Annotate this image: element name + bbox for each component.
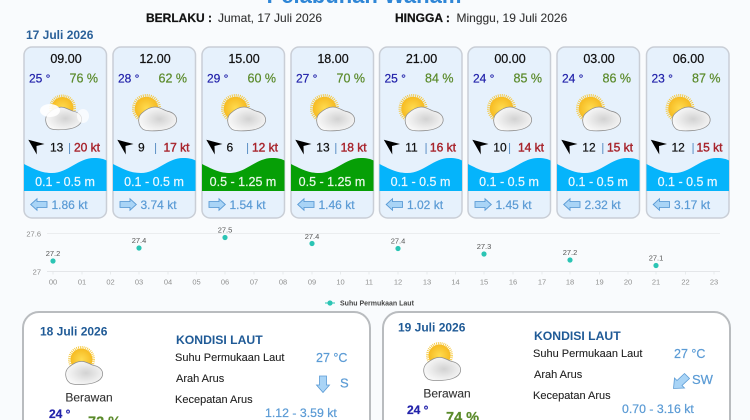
forecast card 09.00: 20 kt (74, 140, 101, 154)
forecast card 18.00: 18 kt (341, 140, 367, 154)
forecast card 03.00: 0.1 - 0.5 m (568, 175, 628, 189)
x axis labels: 22 (681, 278, 690, 286)
x axis labels: 03 (135, 278, 143, 286)
x axis labels: 01 (78, 278, 86, 286)
x axis labels: 11 (365, 278, 373, 286)
data labels: 27.5 (218, 226, 232, 234)
panel: 18 Juli 2026: Berawan (65, 390, 113, 404)
forecast card 03.00: 24 ° (562, 72, 584, 86)
forecast card 06.00: 06.00 (673, 52, 704, 66)
forecast card 18.00: 27 ° (296, 72, 318, 86)
x axis labels: 15 (480, 278, 488, 286)
data points (50, 235, 659, 268)
x axis labels: 08 (279, 278, 287, 286)
forecast card 09.00: 76 % (70, 72, 98, 86)
forecast card 21.00: 21.00 (406, 52, 437, 66)
x axis labels: 21 (652, 278, 660, 286)
x axis labels: 13 (423, 278, 431, 286)
forecast card 15.00: 15.00 (228, 52, 260, 66)
x axis labels: 16 (509, 278, 517, 286)
panel: 18 Juli 2026: KONDISI LAUT (176, 333, 263, 347)
forecast card 09.00 (24, 47, 106, 218)
y axis labels: 27 (33, 268, 41, 276)
forecast card 00.00: 0.1 - 0.5 m (479, 175, 539, 189)
data labels: 27.4 (391, 236, 405, 246)
forecast card 03.00: 2.32 kt (584, 198, 621, 212)
x axis labels: 04 (164, 278, 172, 286)
forecast card 21.00: 84 % (425, 72, 454, 86)
forecast card 00.00 (468, 47, 550, 218)
forecast card 12.00 (113, 47, 196, 218)
chart: sea surface temperature (26, 226, 720, 308)
validity header (146, 11, 568, 25)
x axis labels: 17 (538, 278, 546, 286)
panel: 19 Juli 2026: SW (692, 372, 714, 387)
forecast card 12.00: 9 (138, 140, 145, 154)
data labels: 27.2 (46, 249, 60, 258)
forecast card 12.00: 62 % (158, 72, 187, 86)
x axis labels: 10 (336, 278, 345, 286)
forecast card 09.00: 25 ° (29, 72, 51, 86)
forecast card 21.00: | (424, 140, 428, 154)
data labels: 27.3 (477, 242, 491, 251)
forecast card 12.00: | (154, 140, 157, 154)
forecast card 03.00: 03.00 (583, 52, 615, 66)
forecast card 06.00 (646, 47, 729, 218)
forecast card 00.00: 24 ° (473, 72, 495, 86)
forecast card 03.00: | (601, 140, 604, 154)
data labels: 27.2 (563, 248, 577, 257)
forecast card 12.00: 0.1 - 0.5 m (124, 175, 184, 189)
x axis labels (49, 278, 718, 286)
forecast card 18.00: 13 (316, 140, 330, 154)
forecast card 09.00: 09.00 (50, 52, 82, 66)
forecast card 03.00 (557, 47, 640, 218)
panel: 18 Juli 2026: Kecepatan Arus (175, 394, 253, 406)
forecast card 15.00: 60 % (248, 72, 276, 86)
forecast card 21.00: 11 (405, 140, 418, 154)
x axis labels: 23 (710, 278, 718, 286)
icon: current arrow south (316, 376, 330, 392)
forecast card 18.00: 0.5 - 1.25 m (299, 175, 365, 189)
y axis labels: 27.6 (26, 230, 41, 238)
icon: cloudy (424, 343, 461, 381)
forecast card 15.00: 29 ° (207, 72, 229, 86)
forecast card 06.00: | (692, 140, 695, 154)
panel: 18 Juli 2026: Arah Arus (176, 373, 225, 385)
forecast card 21.00: 0.1 - 0.5 m (391, 175, 450, 189)
forecast card 06.00: 23 ° (652, 72, 673, 86)
x axis labels: 18 (566, 278, 574, 286)
panel: 19 Juli 2026: 19 Juli 2026 (398, 320, 466, 334)
panel: 18 Juli 2026: 18 Juli 2026 (40, 324, 108, 338)
panel: 19 Juli 2026: Suhu Permukaan Laut (533, 348, 642, 360)
icon: current arrow south-west (674, 374, 690, 388)
forecast card 15.00: 0.5 - 1.25 m (210, 175, 276, 189)
forecast card 06.00: 3.17 kt (674, 198, 711, 212)
forecast card 06.00: 15 kt (696, 140, 723, 154)
forecast card 18.00: | (334, 140, 337, 154)
panel: 18 Juli 2026: S (340, 376, 349, 390)
forecast card 21.00 (380, 47, 462, 218)
x axis labels: 09 (308, 278, 316, 286)
icon: cloudy (66, 347, 103, 385)
forecast card 03.00: 15 kt (607, 140, 634, 154)
forecast card 21.00: 16 kt (430, 140, 457, 154)
data labels (46, 226, 663, 262)
forecast card 09.00: | (68, 140, 71, 154)
forecast card 00.00: 10 (493, 140, 507, 154)
forecast card 18.00: 1.46 kt (318, 198, 355, 212)
forecast card 12.00: 28 ° (118, 72, 140, 86)
panel: 19 Juli 2026: 27 °C (674, 347, 705, 361)
forecast card 00.00: 1.45 kt (496, 198, 532, 212)
panel: 19 Juli 2026: Berawan (423, 386, 471, 400)
panel: 18 Juli 2026 (23, 312, 370, 420)
forecast card 00.00: 14 kt (518, 140, 545, 154)
x axis labels: 05 (192, 278, 201, 286)
forecast card 15.00: 1.54 kt (230, 198, 266, 212)
y axis labels (26, 230, 41, 276)
forecast card 06.00: 12 (672, 140, 685, 154)
x axis labels: 19 (595, 278, 604, 286)
forecast card 18.00 (291, 47, 374, 218)
forecast card 06.00: 0.1 - 0.5 m (658, 175, 717, 189)
data labels: 27.4 (305, 232, 319, 241)
panel: 19 Juli 2026: 24 ° (407, 403, 429, 417)
forecast card 00.00: 00.00 (494, 52, 526, 66)
forecast card 09.00: 0.1 - 0.5 m (35, 175, 95, 189)
panel: 19 Juli 2026: Arah Arus (534, 369, 583, 381)
x axis labels: 14 (451, 278, 460, 286)
forecast card 12.00: 17 kt (164, 140, 190, 154)
forecast card 18.00: 70 % (336, 72, 365, 86)
panel: 19 Juli 2026: KONDISI LAUT (534, 329, 621, 343)
x axis labels: 20 (624, 278, 632, 286)
forecast card 21.00: 25 ° (384, 72, 406, 86)
x axis labels: 06 (221, 278, 229, 286)
forecast card 06.00: 87 % (692, 72, 720, 86)
x axis labels: 02 (106, 278, 115, 286)
forecast card 21.00: 1.02 kt (407, 198, 444, 212)
forecast card 00.00: | (508, 140, 511, 154)
forecast card 03.00: 86 % (602, 72, 631, 86)
forecast card 15.00: 12 kt (252, 140, 279, 154)
forecast card 15.00 (202, 47, 284, 218)
forecast card 09.00: 13 (50, 140, 64, 154)
date heading: 17 Juli 2026 (26, 28, 94, 42)
panel: 19 Juli 2026: Kecepatan Arus (533, 390, 611, 402)
validity header: Minggu, 19 Juli 2026 (456, 11, 568, 25)
panel: 18 Juli 2026: 1.12 - 3.59 kt (265, 406, 337, 420)
forecast card 03.00: 12 (582, 140, 596, 154)
forecast card 00.00: 85 % (514, 72, 542, 86)
panel: 18 Juli 2026: Suhu Permukaan Laut (175, 352, 284, 364)
forecast card 15.00: 6 (226, 140, 234, 154)
validity header: HINGGA : (395, 11, 450, 25)
data labels: 27.4 (132, 236, 146, 245)
panel: 19 Juli 2026 (383, 312, 730, 420)
panel: 19 Juli 2026: 0.70 - 3.16 kt (622, 402, 694, 416)
data labels: 27.1 (649, 254, 663, 262)
x axis labels: 07 (250, 278, 258, 286)
forecast card 15.00: | (246, 140, 249, 154)
validity header: BERLAKU : (146, 11, 212, 25)
forecast card 12.00: 12.00 (139, 52, 171, 66)
legend: Suhu Permukaan Laut (340, 300, 415, 308)
forecast card 18.00: 18.00 (317, 52, 349, 66)
validity header: Jumat, 17 Juli 2026 (218, 11, 322, 25)
forecast card 09.00: 1.86 kt (52, 198, 88, 212)
forecast card 12.00: 3.74 kt (140, 198, 177, 212)
x axis labels: 00 (49, 278, 57, 286)
x axis labels: 12 (394, 278, 402, 286)
panel: 18 Juli 2026: 27 °C (316, 351, 347, 365)
